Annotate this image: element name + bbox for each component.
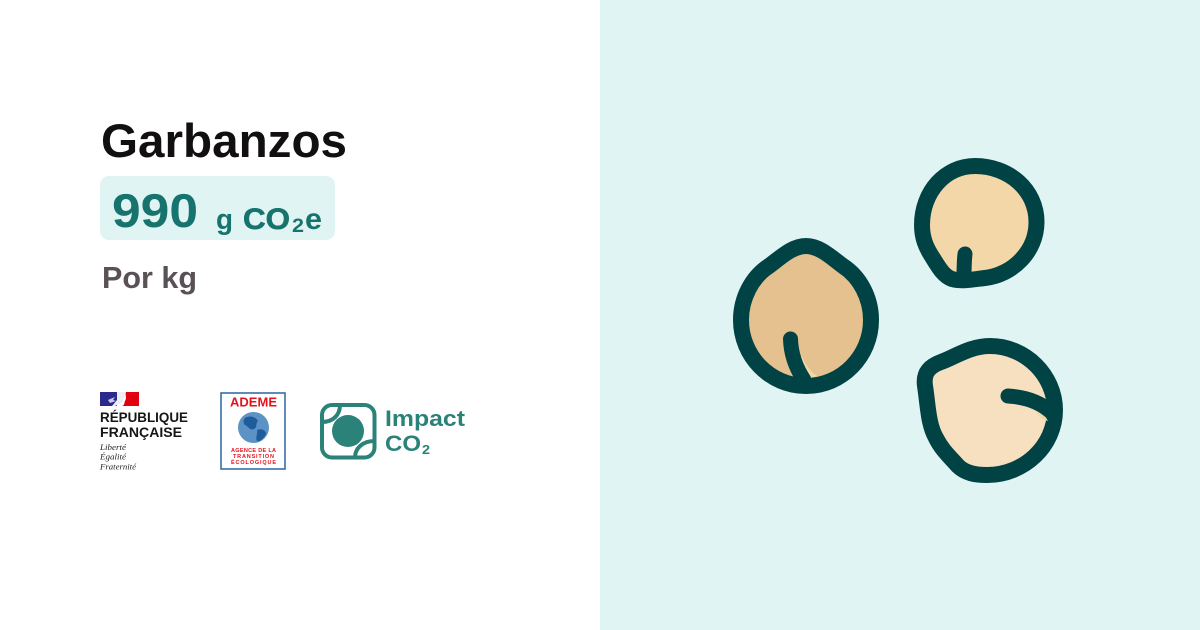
logo: Impact CO2: CO [385, 431, 421, 456]
logo: ADEME [221, 393, 285, 469]
logo: République française: RÉPUBLIQUE [100, 409, 188, 425]
flag [100, 392, 139, 406]
value unit: g [216, 204, 233, 236]
icon: globe [238, 412, 269, 443]
icon: chickpea left [741, 246, 871, 386]
logo: République française: Liberté [99, 442, 127, 452]
icon: Impact CO2 mark [322, 405, 374, 458]
value unit: e [305, 203, 322, 236]
logo: ADEME: ADEME [230, 394, 277, 410]
value unit: CO [243, 203, 290, 236]
logo: République française: Fraternité [99, 462, 137, 472]
icon: chickpea top right [922, 166, 1036, 280]
logo: ADEME: AGENCE DE LA [231, 448, 276, 454]
logo: Impact CO2 [322, 405, 466, 458]
value number: 990 [112, 184, 198, 237]
logo: ADEME: TRANSITION [233, 454, 274, 460]
title: Garbanzos [101, 114, 347, 167]
logo: ADEME: ÉCOLOGIQUE [231, 458, 276, 466]
icon: chickpea bottom right [925, 346, 1055, 475]
logo: Impact CO2: 2 [422, 442, 430, 457]
value pill [100, 176, 335, 240]
logo: République française: Égalité [99, 452, 127, 462]
logo: République française: FRANÇAISE [100, 424, 182, 440]
value unit: 2 [292, 216, 304, 237]
panel: illustration background [600, 0, 1200, 630]
value unit [216, 203, 322, 237]
logo: Impact CO2: Impact [385, 406, 466, 431]
logo: République française [99, 392, 188, 472]
subtitle: per kg: Por kg [102, 260, 197, 295]
